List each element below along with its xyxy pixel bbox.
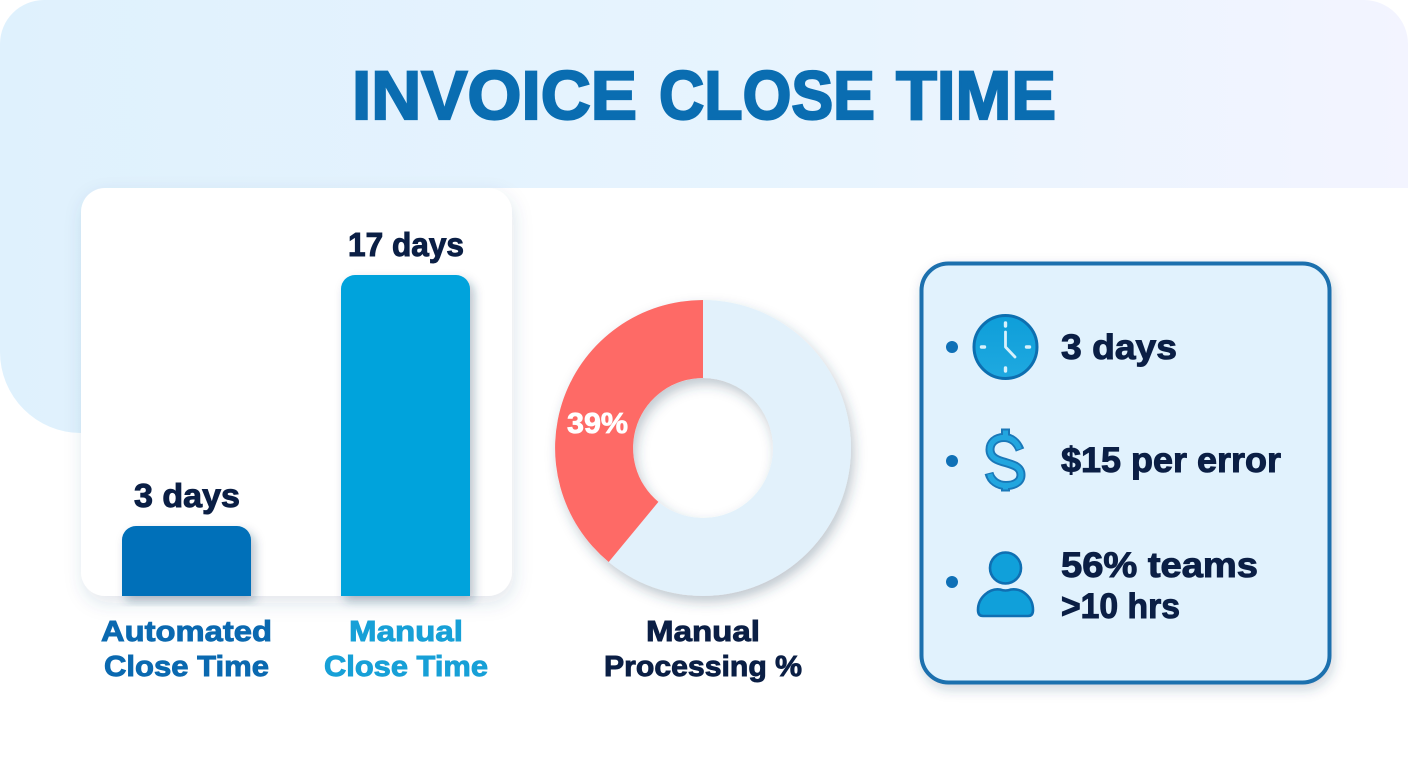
title <box>352 57 1056 134</box>
chart card <box>81 188 512 596</box>
label: automated close time <box>101 616 272 683</box>
bar: manual close time <box>341 275 470 596</box>
donut rings <box>555 300 851 596</box>
text: 56% teams >10 hrs: >10 hrs <box>1061 587 1180 626</box>
icon: clock <box>974 316 1037 378</box>
donut label <box>604 616 802 683</box>
label: manual close time: Manual <box>349 616 463 648</box>
panel: bar chart <box>81 188 512 683</box>
value: 3 days: 3 days <box>134 477 240 514</box>
bar: automated close time <box>122 526 251 596</box>
label: automated close time: Close Time <box>104 651 269 683</box>
panel: key stats <box>922 264 1330 682</box>
text: 56% teams >10 hrs <box>1061 546 1258 626</box>
text: $15 per error: $15 per error <box>1061 441 1281 480</box>
title: TIME <box>896 57 1056 134</box>
panel: donut chart <box>555 300 851 683</box>
text: 3 days: 3 days <box>1061 328 1177 367</box>
bullet: clock row <box>946 341 958 353</box>
bullet: dollar row <box>946 455 958 467</box>
icon: person <box>978 552 1033 616</box>
header background band <box>0 0 1408 433</box>
bullet: person row <box>946 576 958 588</box>
stats card <box>922 264 1330 682</box>
donut value: 39% <box>567 408 628 440</box>
donut label: Processing % <box>604 651 802 683</box>
icon: dollar sign <box>989 428 1021 492</box>
label: manual close time <box>324 616 488 683</box>
value: 17 days: 17 days <box>348 226 464 263</box>
text: 56% teams >10 hrs: 56% teams <box>1061 546 1258 585</box>
title: CLOSE <box>659 57 875 134</box>
label: automated close time: Automated <box>101 616 272 648</box>
donut label: Manual <box>646 616 760 648</box>
label: manual close time: Close Time <box>324 651 488 683</box>
title: INVOICE <box>352 57 637 134</box>
